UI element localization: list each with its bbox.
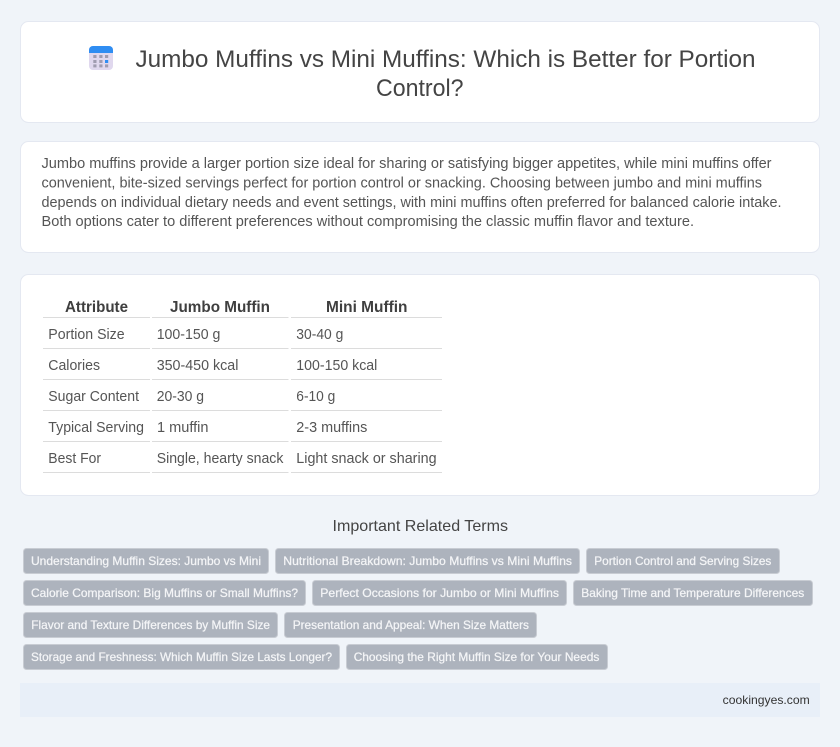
title: Control? — [376, 75, 464, 102]
related term tags — [24, 548, 812, 670]
description text: Jumbo muffins provide a larger portion size ideal for sharing or satisfying bigger appetites, while mini muffins offer — [42, 156, 772, 172]
row: calories: 100-150 kcal — [296, 358, 377, 374]
row: best for: Single, hearty snack — [157, 451, 284, 467]
heading: important related terms: Important Related Terms — [332, 518, 508, 535]
table header: Jumbo Muffin — [170, 299, 270, 316]
footer source: cookingyes.com — [723, 693, 810, 707]
row: best for: Light snack or sharing — [296, 451, 437, 467]
tag: Portion Control and Serving Sizes — [594, 554, 771, 568]
tag — [24, 612, 278, 638]
icon: calendar — [89, 46, 113, 70]
tag — [24, 548, 268, 574]
tag — [312, 580, 566, 606]
description text — [42, 156, 782, 230]
row: portion size: Portion Size — [48, 327, 125, 343]
tag: Choosing the Right Muffin Size for Your Needs — [354, 650, 599, 664]
tag: Flavor and Texture Differences by Muffin Size — [31, 618, 270, 632]
row: typical serving: 1 muffin — [157, 420, 208, 436]
tag — [346, 644, 608, 670]
tag: Storage and Freshness: Which Muffin Size Lasts Longer? — [31, 650, 332, 664]
panel: comparison table — [20, 274, 820, 496]
row: typical serving: Typical Serving — [48, 420, 144, 436]
row: typical serving — [48, 420, 367, 436]
row: best for — [48, 451, 437, 467]
panel: description — [20, 142, 820, 252]
row: sugar content: 6-10 g — [296, 389, 335, 405]
footer — [20, 683, 820, 717]
tag — [276, 548, 580, 574]
tag — [284, 612, 536, 638]
row: portion size: 100-150 g — [157, 327, 220, 343]
tag: Nutritional Breakdown: Jumbo Muffins vs Mini Muffins — [283, 554, 572, 568]
tag — [24, 580, 306, 606]
title: Jumbo Muffins vs Mini Muffins: Which is Better for Portion — [136, 46, 756, 73]
panel: header — [20, 22, 820, 122]
tag: Calorie Comparison: Big Muffins or Small Muffins? — [31, 586, 298, 600]
row: sugar content: 20-30 g — [157, 389, 204, 405]
row: portion size — [48, 327, 343, 343]
row: calories: Calories — [48, 358, 100, 374]
tag: Baking Time and Temperature Differences — [581, 586, 804, 600]
row: portion size: 30-40 g — [296, 327, 343, 343]
tag: Understanding Muffin Sizes: Jumbo vs Mini — [31, 554, 261, 568]
table grid lines — [43, 318, 442, 472]
row: sugar content — [48, 389, 335, 405]
tag: Presentation and Appeal: When Size Matters — [293, 618, 529, 632]
row: calories: 350-450 kcal — [157, 358, 238, 374]
table header: Mini Muffin — [326, 299, 408, 316]
table header — [65, 299, 408, 316]
title — [136, 46, 756, 102]
tag — [574, 580, 812, 606]
tag — [24, 644, 340, 670]
tag — [586, 548, 780, 574]
row: calories — [48, 358, 377, 374]
tag: Perfect Occasions for Jumbo or Mini Muffins — [320, 586, 559, 600]
row: typical serving: 2-3 muffins — [296, 420, 367, 436]
description text: convenient, bite-sized servings perfect for portion control or snacking. Choosing between jumbo and mini muffins — [42, 176, 762, 192]
row: best for: Best For — [48, 451, 101, 467]
description text: depends on individual dietary needs and event settings, with mini muffins often preferred for balanced calorie intake. — [42, 195, 782, 211]
table header: Attribute — [65, 299, 128, 316]
row: sugar content: Sugar Content — [48, 389, 139, 405]
description text: Both options cater to different preferences without compromising the classic muffin flavor and texture. — [42, 214, 694, 230]
